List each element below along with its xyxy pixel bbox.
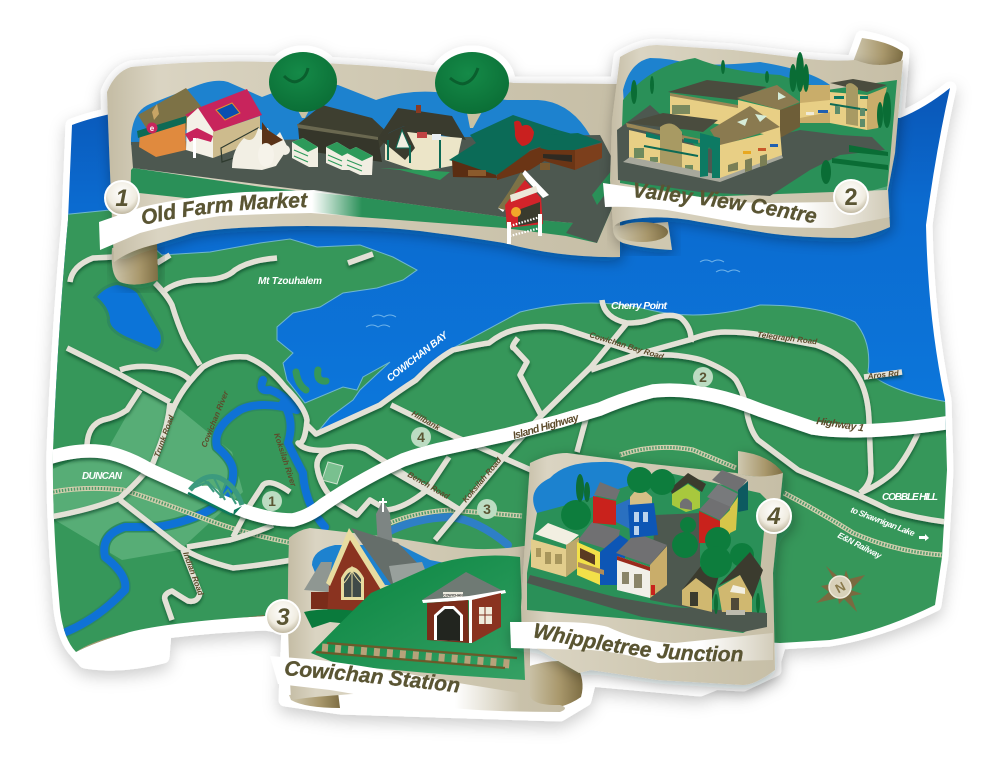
cottage right	[714, 552, 763, 615]
ribbon	[270, 656, 520, 720]
road markers	[262, 367, 713, 519]
market with green roof	[449, 115, 576, 180]
road markers: 1	[268, 493, 276, 509]
Duncan highlighted zone	[50, 392, 243, 560]
map silhouette: white outline with soft shadow	[53, 37, 950, 715]
banner 4 title: Whippletree Junction	[534, 622, 743, 662]
road markers: 4	[417, 429, 425, 445]
scroll curl top right	[738, 451, 783, 477]
road labels: Bench Road	[406, 470, 452, 502]
road markers: 2	[699, 369, 707, 385]
yellow blue store	[577, 522, 628, 585]
banner 3: Cowichan Station	[265, 498, 582, 712]
marker 3	[266, 600, 300, 634]
right building	[830, 79, 887, 130]
river	[58, 380, 508, 635]
ribbon	[99, 190, 362, 250]
sky	[623, 58, 830, 120]
cream store	[531, 523, 579, 577]
marker 3: 3	[276, 604, 290, 631]
scroll curl left	[112, 243, 158, 285]
road labels	[152, 330, 900, 598]
foreground trees	[700, 527, 754, 578]
tree right	[435, 52, 509, 114]
row shops	[800, 85, 830, 123]
road network	[50, 254, 946, 620]
tennis court	[322, 462, 343, 484]
scroll curl bottom left	[289, 692, 340, 708]
banner body	[288, 528, 565, 712]
map place labels: Mt Tzouhalem	[258, 276, 322, 287]
back building	[668, 80, 767, 128]
barn sign	[498, 170, 549, 244]
road labels: Koksilah River	[272, 432, 298, 488]
hills and ground	[620, 58, 897, 197]
road labels: Cowichan Bay Road	[588, 330, 666, 362]
rooster	[514, 121, 534, 146]
map: water and land	[40, 80, 960, 680]
church	[304, 498, 430, 628]
banner body	[107, 62, 620, 262]
dark barn	[297, 105, 390, 162]
ground	[527, 473, 767, 633]
railway	[53, 447, 942, 555]
plant crates	[292, 138, 373, 175]
ribbon	[510, 622, 773, 663]
water ripples	[366, 260, 740, 327]
water	[40, 80, 960, 440]
sky	[533, 462, 650, 520]
red yellow teal row	[699, 470, 748, 543]
map place labels	[82, 276, 938, 561]
tree trunks	[295, 105, 484, 128]
station: COWICHAN	[443, 594, 463, 598]
banner 4: Whippletree Junction	[506, 450, 800, 697]
map place labels: E&N Railway	[836, 530, 885, 561]
road labels: Hillbank	[410, 409, 442, 433]
ribbon	[603, 183, 890, 228]
tree left	[269, 52, 337, 112]
banner 2 title: Valley View Centre	[635, 182, 816, 223]
marker 4: 4	[766, 503, 781, 530]
banner 2: Valley View Centre	[603, 38, 912, 256]
brown curl at lower left of the map	[76, 615, 264, 652]
road labels: Trunk Road	[152, 413, 176, 459]
compass rose	[816, 566, 865, 612]
station	[422, 572, 506, 643]
front building	[623, 113, 783, 182]
banner body	[610, 45, 903, 238]
road labels: Highway 1	[816, 415, 865, 434]
banner body	[521, 453, 783, 685]
estuary fingers	[296, 370, 326, 390]
cypress trees	[631, 52, 891, 184]
map place labels: COBBLE HILL	[882, 492, 938, 503]
land	[40, 210, 960, 680]
map place labels: DUNCAN	[82, 471, 123, 482]
highway	[48, 390, 952, 520]
map place labels: Cherry Point	[611, 300, 668, 312]
road labels: Island Highway	[512, 411, 581, 442]
nursery greenhouse and statues	[221, 122, 290, 170]
marker 2	[834, 180, 868, 214]
bridge	[188, 476, 242, 516]
restaurant	[137, 88, 204, 157]
road labels: Cowichan River	[200, 389, 231, 449]
road labels: Indian Road	[181, 551, 206, 598]
marker 1	[105, 181, 139, 215]
road labels: Telegraph Road	[757, 330, 819, 346]
red tall building	[593, 482, 620, 525]
white house with red roof	[185, 89, 262, 158]
green hill	[311, 555, 525, 680]
green small house	[670, 473, 706, 512]
map place labels: COWICHAN BAY	[385, 329, 451, 384]
lake	[97, 285, 161, 349]
ground and road	[130, 135, 612, 243]
railway tracks	[316, 643, 517, 668]
tan roof corner building	[700, 106, 782, 178]
road labels: Koksilah Road	[461, 455, 504, 504]
banner 1 title: Old Farm Market	[142, 192, 308, 224]
marker 2: 2	[844, 184, 858, 211]
marker 1: 1	[115, 185, 129, 212]
parking road	[617, 105, 885, 196]
sky	[312, 545, 455, 585]
tudor house	[378, 105, 466, 180]
compass rose: N	[833, 579, 848, 596]
road	[527, 513, 767, 632]
restaurant: e	[150, 124, 155, 133]
banner 1: Old Farm Market	[99, 52, 630, 293]
scroll curl bottom right	[524, 661, 583, 710]
road markers: 3	[483, 501, 491, 517]
small shed	[540, 133, 602, 170]
banner 3 title: Cowichan Station	[285, 661, 460, 692]
middle gabled building	[737, 85, 800, 138]
sky	[131, 81, 595, 145]
road labels: Aros Rd	[866, 369, 900, 381]
scroll curl bottom left	[613, 222, 672, 250]
cottage left	[682, 553, 720, 612]
map place labels: to Shawnigan Lake	[849, 505, 917, 538]
marker 4	[757, 499, 791, 533]
scroll curl top right	[853, 38, 903, 72]
blue tower	[616, 482, 658, 538]
white store	[616, 533, 667, 598]
background trees	[561, 467, 698, 558]
